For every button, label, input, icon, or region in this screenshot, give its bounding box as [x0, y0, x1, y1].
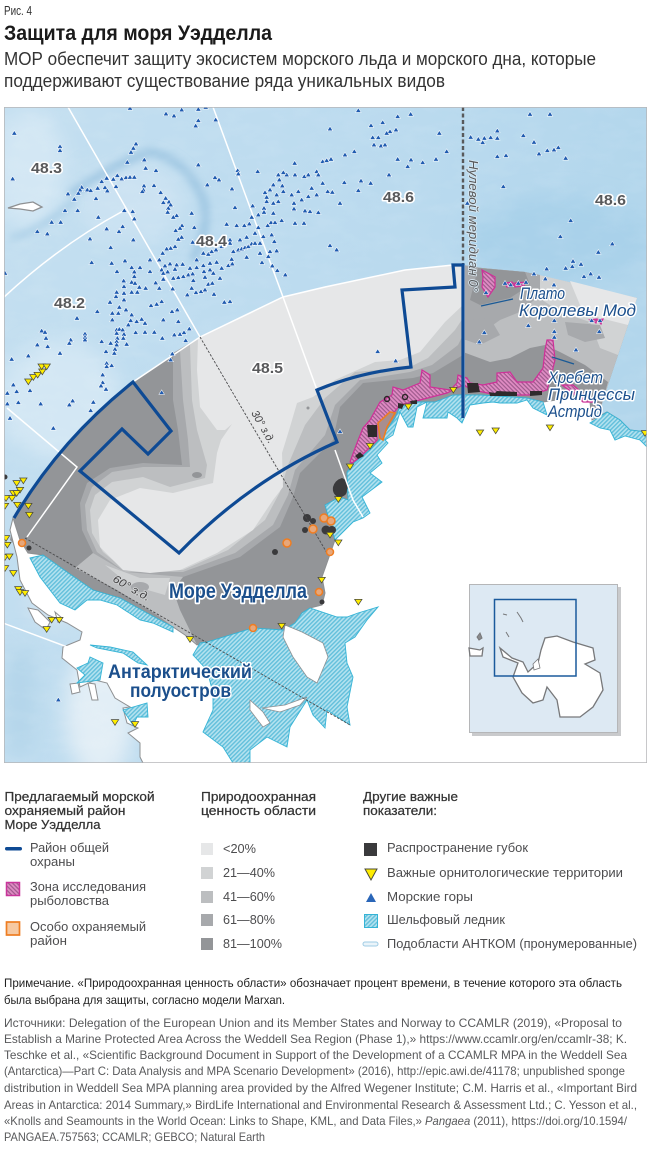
60 W meridian: [25, 538, 350, 725]
leader lines: [481, 299, 574, 364]
legend heading: показатели:: [363, 803, 437, 818]
sources: distribution in Weddell Sea MPA planning area provided by the Alfred Wegener Institute; C.M. Harris et al., «Important Bird: [4, 1081, 637, 1095]
conservation value zones: [10, 265, 637, 644]
legend heading: Море Уэдделла: [4, 817, 101, 832]
icon: subarea: [363, 942, 378, 946]
note: [4, 976, 622, 1007]
subarea labels: 48.3: [31, 161, 62, 177]
seamounts east: [327, 111, 612, 432]
legend heading: [363, 789, 458, 818]
seamounts west: [5, 107, 323, 700]
specially protected area: [378, 412, 395, 440]
bird area label: Важные орнитологические территории: [387, 865, 623, 880]
sponge distribution: [2, 383, 542, 604]
place labels: Королевы Мод: [519, 301, 636, 320]
legend: conservation value: [201, 789, 316, 951]
swatch labels: 81—100%: [223, 936, 282, 951]
subarea labels: 48.2: [54, 296, 85, 312]
general protection label: [30, 840, 109, 869]
subarea boundary arc: [133, 265, 453, 382]
swatches: [201, 843, 213, 950]
place labels: [108, 284, 636, 702]
subarea labels: 48.6: [595, 193, 626, 209]
ocean background: [0, 107, 650, 780]
60 W label: 60° з.д.: [110, 573, 152, 604]
legend: MPA: [4, 789, 154, 948]
subarea label: Подобласти АНТКОМ (пронумерованные): [387, 936, 637, 951]
Berkner Island and ice rises: [250, 625, 328, 727]
sources: (Antarctica)—Part C: Data Analysis and MPA Scenario Development» (2016), http://epic.awi.de/41178; unpublished sponge: [4, 1064, 625, 1078]
panel: map: [0, 107, 650, 780]
fishing zone label: рыболовства: [30, 893, 110, 908]
protected area label: район: [30, 933, 67, 948]
subtitle: [4, 48, 596, 91]
title: Защита для моря Уэдделла: [4, 22, 272, 45]
sources: «Knolls and Seamounts in the World Ocean: Links to Shape, KML, and Data Files,» Pangaea (2011), https://doi.org/10.1594/: [4, 1114, 628, 1128]
legend heading: Предлагаемый морской: [4, 789, 154, 804]
swatch labels: <20%: [223, 841, 256, 856]
specially protected circles: [18, 514, 335, 632]
label: Peninsula: Антарктический: [108, 662, 252, 683]
sources: [4, 1016, 637, 1144]
island: South Georgia: [8, 202, 42, 211]
figure label: Рис. 4: [4, 4, 32, 18]
swatch labels: 21—40%: [223, 865, 275, 880]
prime meridian label: Нулевой меридиан 0°: [466, 160, 481, 292]
ice shelf label: Шельфовый ледник: [387, 912, 505, 927]
icon: seamount: [366, 893, 376, 902]
swatch labels: 61—80%: [223, 912, 275, 927]
icon: sponges: [364, 843, 377, 856]
icon: fishing zone: [6, 882, 20, 896]
seamount label: Морские горы: [387, 889, 473, 904]
legend heading: Природоохранная: [201, 789, 316, 804]
protected area label: Особо охраняемый: [30, 919, 146, 934]
fishing research zone: [350, 270, 603, 463]
swatch labels: 41—60%: [223, 889, 275, 904]
place labels: Астрид: [547, 402, 602, 421]
place labels: полуостров: [130, 681, 231, 702]
30 W meridian: [200, 337, 327, 553]
bird areas: [5, 367, 645, 724]
subtitle: поддерживают существование ряда уникальных видов: [4, 70, 445, 91]
MPA general protection boundary: [14, 265, 463, 553]
Antarctic land: [10, 395, 647, 763]
icon: bird area: [365, 869, 377, 880]
prime meridian: [462, 107, 464, 265]
legend heading: охраняемый район: [4, 803, 126, 818]
sponges label: Распространение губок: [387, 840, 528, 855]
fishing zone label: Зона исследования: [30, 879, 146, 894]
subarea labels: 48.6: [383, 190, 414, 206]
map border: [4, 107, 647, 763]
icon: ice shelf: [364, 914, 378, 928]
sources: Areas in Antarctica: 2014 Summary,» BirdLife International and Environmental Research & Assessment Ltd.; C. Yesson et al.,: [4, 1098, 637, 1112]
subarea labels: 48.5: [252, 361, 283, 377]
subtitle: МОР обеспечит защиту экосистем морского льда и морского дна, которые: [4, 48, 596, 69]
general protection label: охраны: [30, 854, 75, 869]
place labels: Принцессы: [548, 385, 635, 404]
legend heading: ценность области: [201, 803, 316, 818]
label: Sea: Море Уэдделла: [169, 580, 307, 603]
label: Plateau: Плато: [520, 284, 565, 303]
ice shelves: [30, 395, 647, 763]
icon: general protection line: [5, 847, 22, 850]
fishing zone label: [30, 879, 146, 908]
islands off the peninsula: [28, 608, 98, 700]
legend: other indicators: [363, 789, 637, 951]
note: была выбрана для защиты, согласно модели Marxan.: [4, 993, 285, 1007]
locator inset: [469, 584, 621, 736]
subarea labels: 48.4: [196, 234, 227, 250]
legend heading: Другие важные: [363, 789, 458, 804]
label: Ridge: Хребет: [547, 368, 603, 387]
protected area label: [30, 919, 146, 948]
note: Примечание. «Природоохранная ценность области» обозначает процент времени, в течение которого эта область: [4, 976, 622, 990]
subarea labels: [31, 161, 626, 377]
30 W label: 30° з.д.: [248, 408, 277, 446]
sources: Источники: Delegation of the European Union and its Member States and Norway to CCAMLR (2019), «Proposal to: [4, 1016, 622, 1030]
sources: Teschke et al., «Scientific Background Document in Support of the Development of a CCAMLR MPA in the Weddell Sea: [4, 1048, 627, 1062]
icon: protected area: [6, 922, 20, 935]
sources: PANGAEA.757563; CCAMLR; GEBCO; Natural Earth: [4, 1130, 265, 1144]
legend heading: [4, 789, 154, 832]
general protection label: Район общей: [30, 840, 109, 855]
sources: Establish a Marine Protected Area Across the Weddell Sea Region (Phase 1),» https://www.ccamlr.org/en/ccamlr-38; K.: [4, 1032, 627, 1046]
subarea lines: [3, 107, 464, 648]
swatch labels: [223, 841, 282, 951]
legend heading: [201, 789, 316, 818]
